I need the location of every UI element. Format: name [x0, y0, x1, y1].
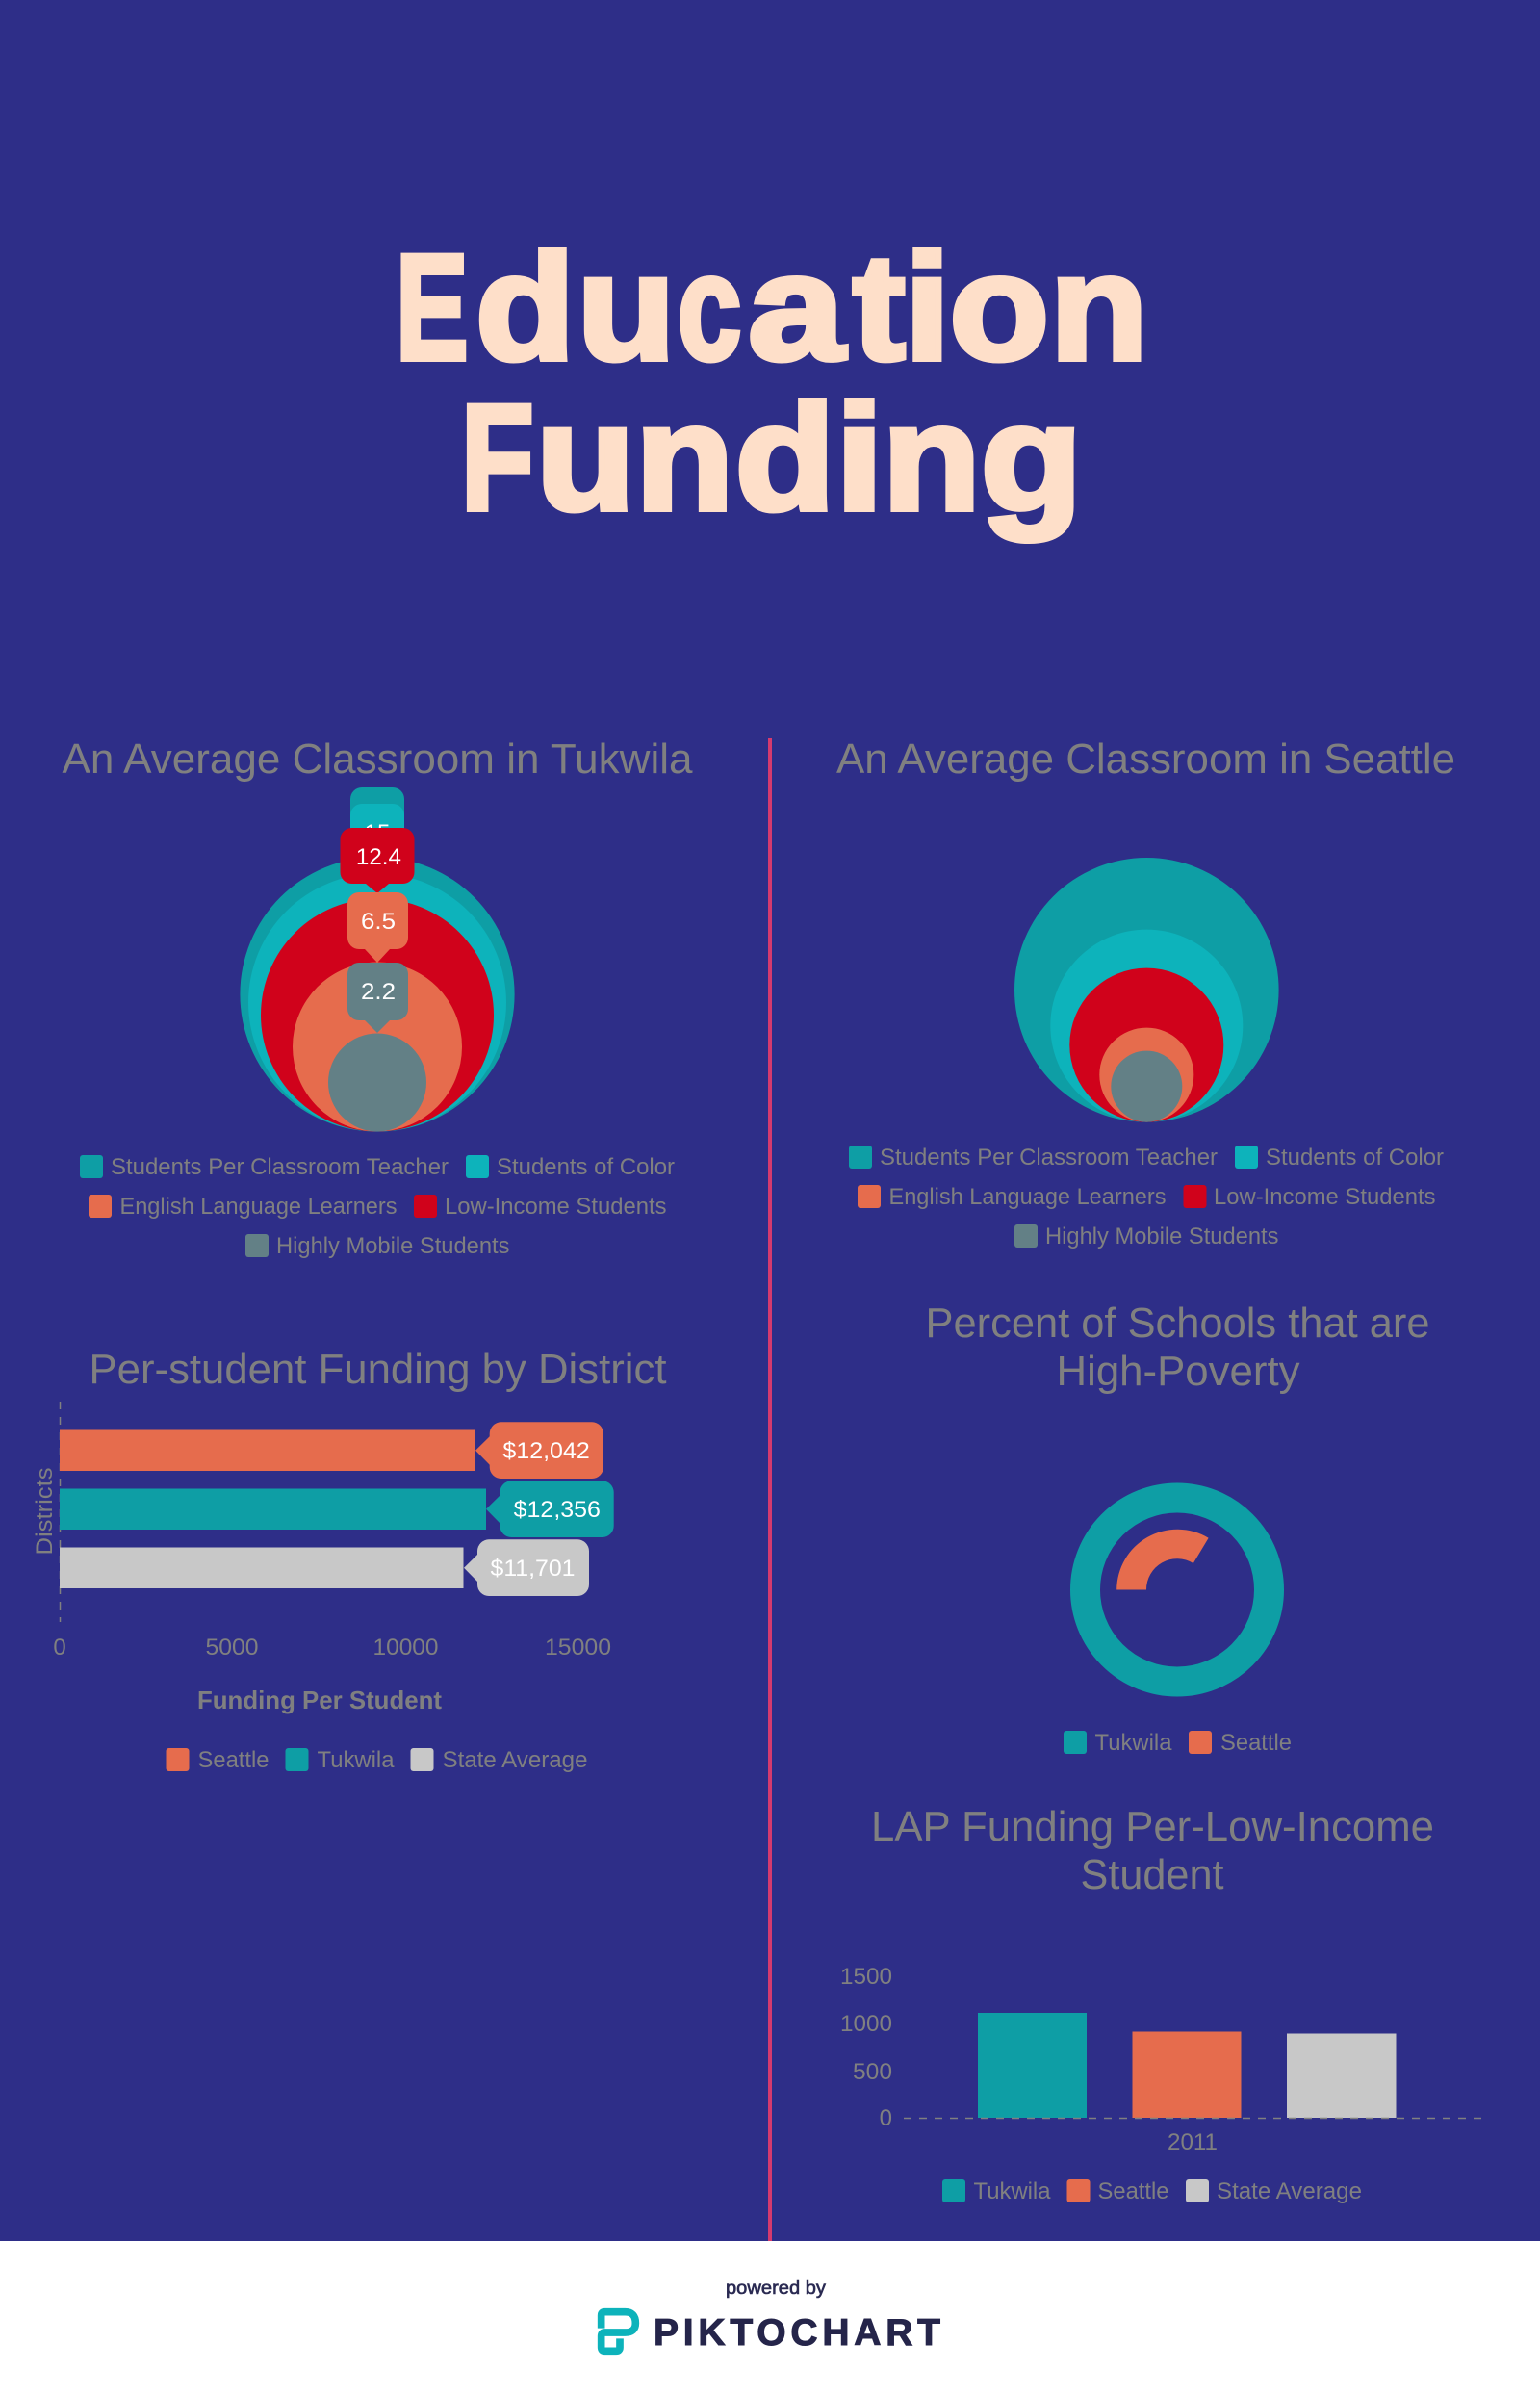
legend: Seattle classroom: English Language Learners	[889, 1184, 1167, 1210]
legend: Seattle classroom: Low-Income Students	[1214, 1184, 1436, 1210]
title: g	[981, 374, 1082, 542]
chart: Tukwila nested circles: 12.4	[356, 844, 401, 870]
center divider	[768, 738, 772, 2241]
title: i	[835, 374, 884, 542]
legend: per-student funding	[166, 1747, 587, 1773]
legend: Tukwila classroom: Highly Mobile Students	[276, 1233, 510, 1259]
legend: per-student funding: Seattle	[198, 1747, 270, 1773]
heading: Tukwila classroom: An Average Classroom in Tukwila	[62, 735, 693, 783]
legend: Tukwila classroom: Students of Color	[497, 1154, 675, 1180]
panel: classroom in Seattle	[836, 735, 1455, 1249]
panel: classroom in Tukwila	[62, 735, 693, 1259]
legend: LAP funding: State Average	[1217, 2178, 1362, 2204]
axis: funding values: 0	[53, 1635, 66, 1661]
legend: Tukwila classroom	[80, 1154, 675, 1259]
icon: Piktochart logo	[602, 2312, 635, 2351]
callout: State average value: $11,701	[491, 1556, 576, 1582]
heading: high-poverty schools	[926, 1300, 1430, 1395]
legend: Tukwila classroom: Students Per Classroom Teacher	[111, 1154, 449, 1180]
chart: concentric arcs	[1086, 1498, 1269, 1682]
title: c	[678, 224, 741, 392]
title: d	[735, 374, 835, 542]
title: t	[853, 224, 905, 392]
legend: Tukwila classroom: English Language Learners	[119, 1194, 397, 1220]
chart: vertical bars: 500	[853, 2059, 892, 2085]
legend: per-student funding: Tukwila	[318, 1747, 395, 1773]
title: u	[578, 224, 676, 392]
heading: per-student funding: Per-student Funding by District	[89, 1346, 666, 1393]
title: n	[635, 374, 733, 542]
legend: LAP funding: Seattle	[1097, 2178, 1168, 2204]
callout: Tukwila value: $12,356	[514, 1497, 601, 1523]
heading: high-poverty schools: High-Poverty	[1057, 1348, 1299, 1395]
text: powered by: powered by	[726, 2279, 827, 2299]
footer: Piktochart branding	[602, 2279, 940, 2354]
callout: State average value	[464, 1539, 589, 1596]
legend: LAP funding	[942, 2178, 1362, 2204]
title: u	[536, 374, 635, 542]
title: F	[461, 374, 534, 542]
chart: Tukwila nested circles: 2.2	[361, 979, 396, 1005]
chart: vertical bars: 1000	[840, 2011, 892, 2037]
callout: Seattle value: $12,042	[502, 1438, 590, 1464]
chart: vertical bars: 2011	[1168, 2129, 1218, 2155]
chart: Seattle nested circles	[1014, 858, 1279, 1122]
chart: vertical bars: 1500	[840, 1964, 892, 1990]
axis: funding values: 15000	[545, 1635, 611, 1661]
axis title: Districts: Districts	[32, 1467, 58, 1556]
title: E	[396, 224, 468, 392]
legend: Seattle classroom: Highly Mobile Students	[1045, 1223, 1278, 1249]
text: PIKTOCHART wordmark: PIKTOCHART	[654, 2312, 940, 2354]
axis: funding values	[53, 1635, 611, 1661]
legend: LAP funding: Tukwila	[974, 2178, 1051, 2204]
legend: high-poverty schools	[1064, 1730, 1292, 1756]
title	[396, 224, 1148, 542]
legend: Seattle classroom	[849, 1145, 1444, 1249]
title: n	[883, 374, 981, 542]
title: o	[950, 224, 1049, 392]
heading: LAP funding: LAP Funding Per-Low-Income	[871, 1803, 1434, 1850]
chart: Tukwila nested circles	[240, 787, 515, 1132]
chart: Tukwila nested circles: 15	[365, 820, 390, 846]
heading: LAP funding	[871, 1803, 1434, 1898]
chart: Tukwila nested circles: 6.5	[361, 909, 396, 935]
title: a	[748, 224, 846, 392]
callout: Tukwila value	[486, 1481, 614, 1537]
heading: LAP funding: Student	[1080, 1851, 1224, 1898]
legend: Seattle classroom: Students Per Classroom Teacher	[880, 1145, 1218, 1171]
title: i	[905, 224, 950, 392]
panel: LAP funding	[840, 1803, 1484, 2204]
title: d	[475, 224, 575, 392]
legend: high-poverty schools: Seattle	[1220, 1730, 1292, 1756]
legend: Seattle classroom: Students of Color	[1266, 1145, 1444, 1171]
panel: high-poverty schools	[926, 1300, 1430, 1756]
axis title: Funding Per Student: Funding Per Student	[197, 1686, 442, 1714]
title: n	[1050, 224, 1148, 392]
heading: Seattle classroom: An Average Classroom in Seattle	[836, 735, 1455, 783]
callout: Seattle value	[475, 1422, 603, 1479]
legend: high-poverty schools: Tukwila	[1095, 1730, 1172, 1756]
chart: horizontal bars	[60, 1402, 614, 1622]
heading: high-poverty schools: Percent of Schools that are	[926, 1300, 1430, 1347]
axis: funding values: 5000	[206, 1635, 258, 1661]
chart: vertical bars	[840, 1964, 1484, 2155]
axis: funding values: 10000	[373, 1635, 439, 1661]
legend: Tukwila classroom: Low-Income Students	[445, 1194, 666, 1220]
chart: vertical bars: 0	[880, 2105, 892, 2131]
legend: per-student funding: State Average	[443, 1747, 587, 1773]
panel: per-student funding	[32, 1346, 666, 1773]
